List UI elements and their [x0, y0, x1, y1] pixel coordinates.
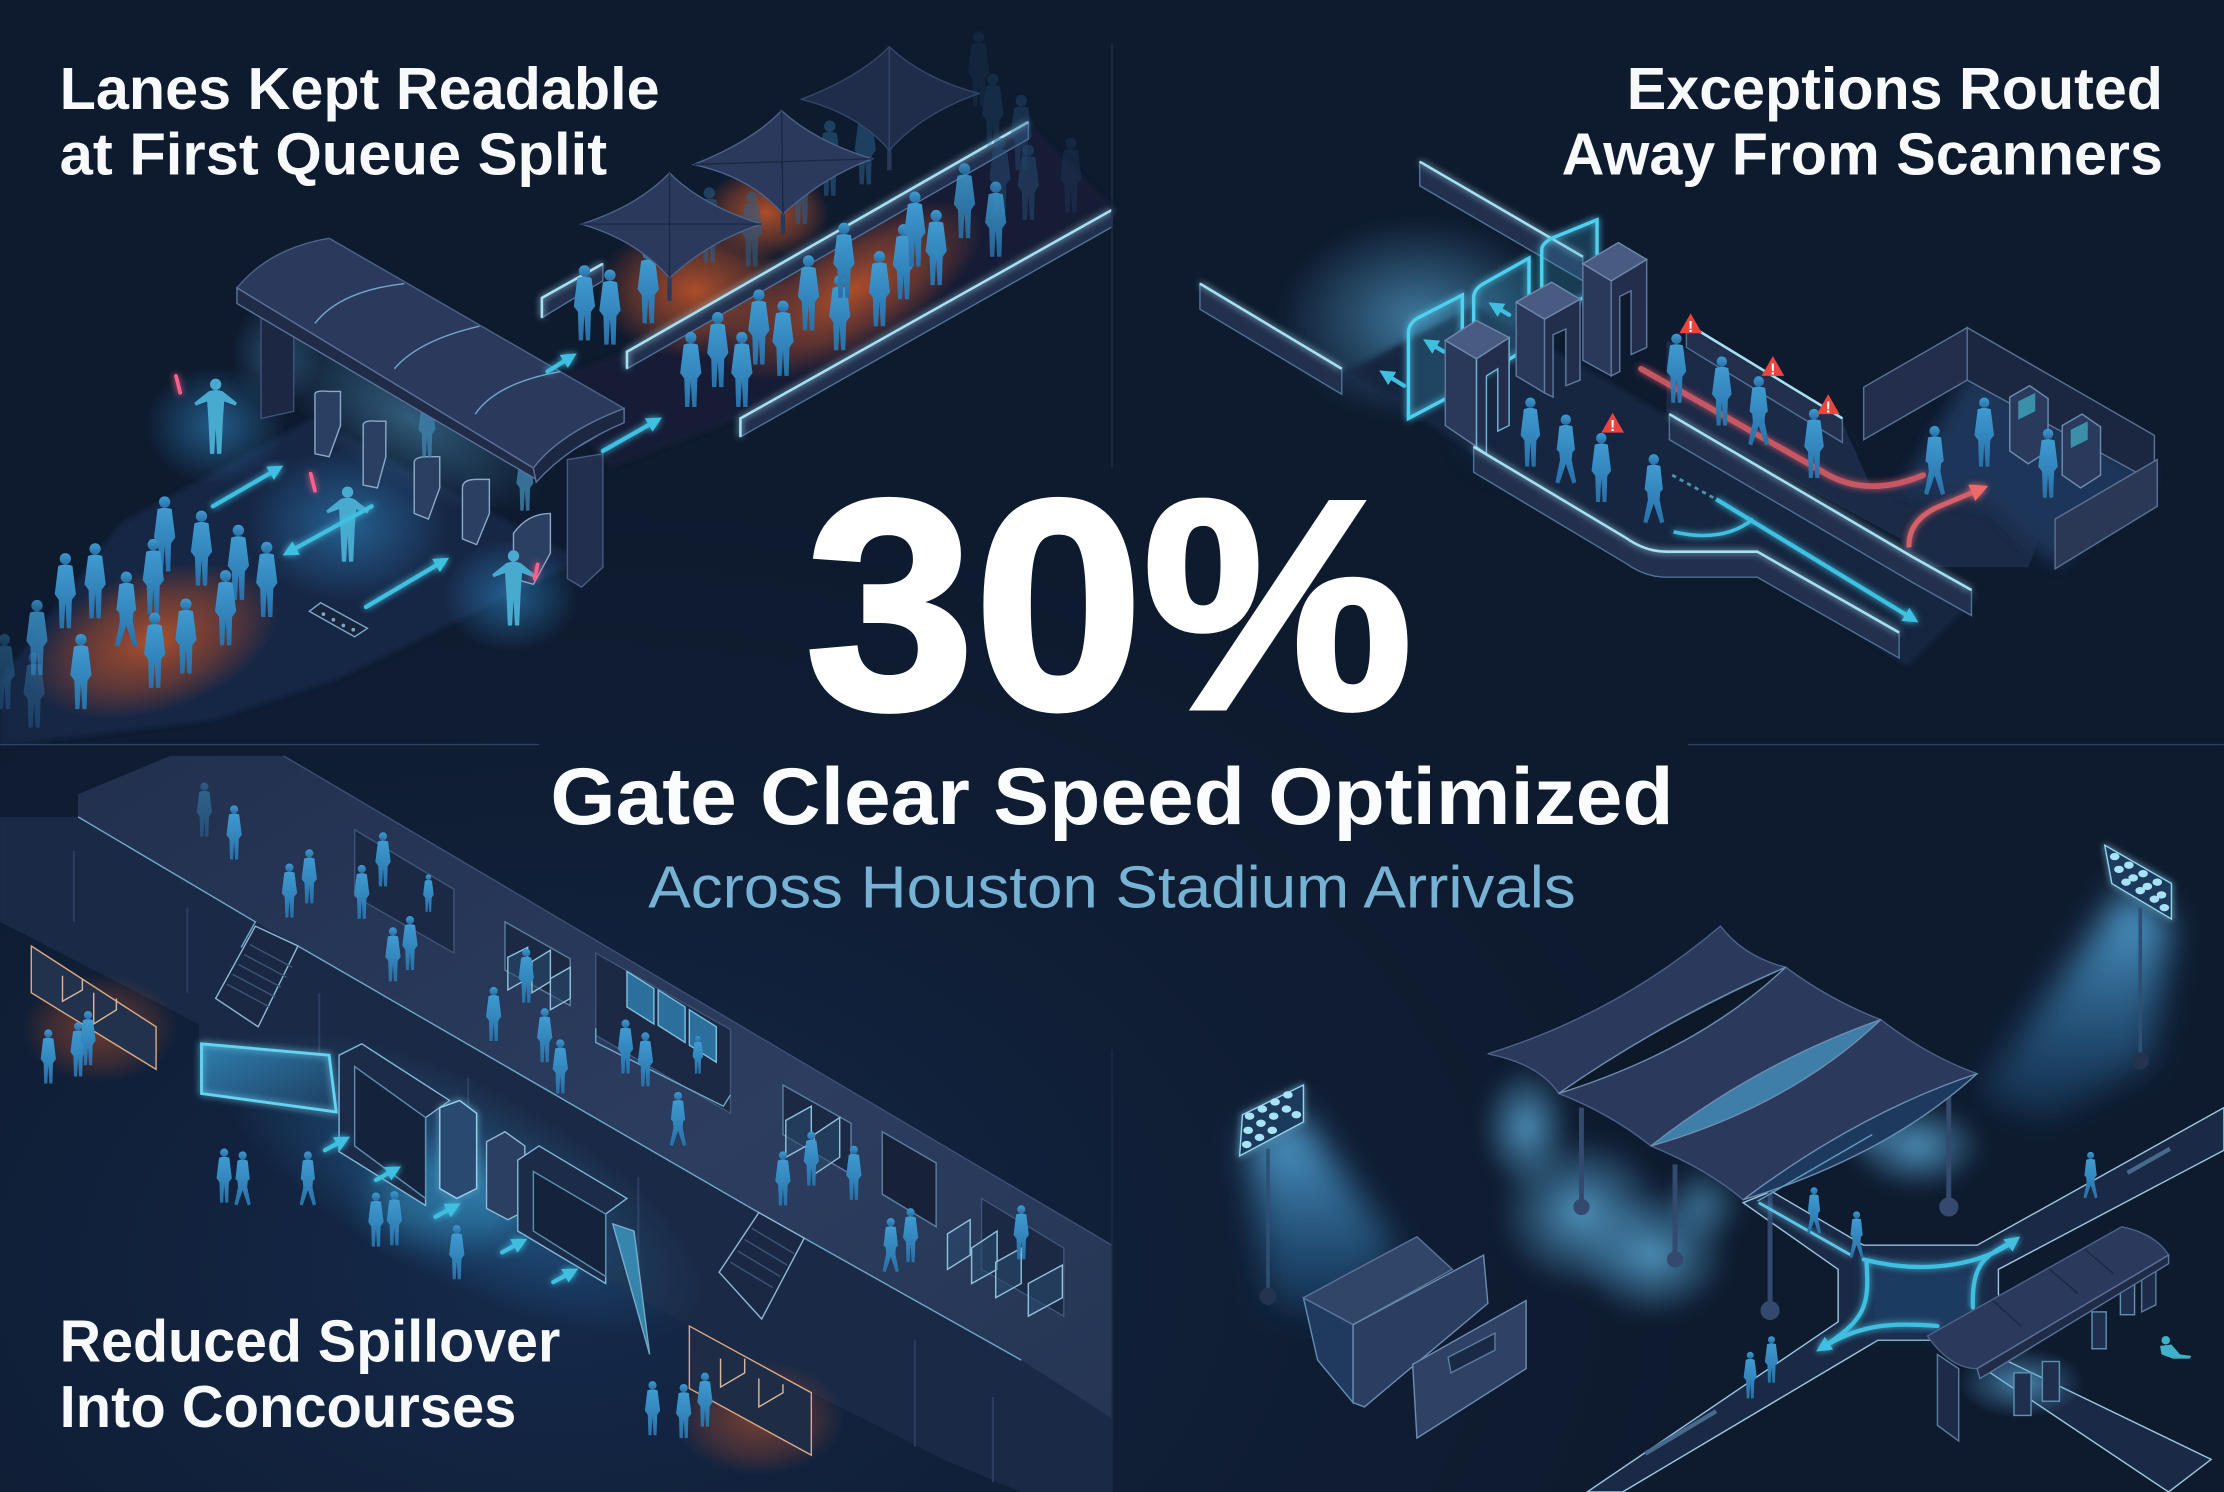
lane floors	[0, 122, 1112, 746]
display screens	[627, 972, 716, 1062]
upper exception rail	[1686, 323, 1842, 442]
flow arrows left	[1386, 306, 1509, 386]
turnstiles on deck	[508, 947, 1062, 1316]
ground glow	[176, 970, 746, 1398]
queue figures upper lanes	[574, 163, 1006, 407]
warning icons: !	[1770, 361, 1776, 378]
clear path arrow	[1672, 475, 1912, 618]
arrival canopy	[237, 238, 624, 482]
panel: lanes at first queue split	[0, 31, 1112, 749]
middle rail	[1669, 414, 1971, 616]
heading: reduced spillover	[60, 1308, 560, 1440]
glass arches	[1408, 220, 1597, 418]
main deck	[78, 756, 1112, 1418]
floodlight upper right	[2105, 845, 2171, 1069]
warning icons: !	[1688, 319, 1693, 336]
security scanner C	[1583, 243, 1647, 376]
security scanner B	[1516, 282, 1580, 397]
queue rails	[542, 122, 1112, 437]
top wall rail	[1420, 162, 1583, 281]
travellers in queue	[1521, 334, 1945, 523]
turnstile gates	[315, 391, 550, 584]
fog beneath canopy	[1481, 1064, 1986, 1319]
heading: exceptions routed	[1562, 55, 2163, 187]
location line: Across Houston Stadium Arrivals	[648, 854, 1576, 921]
stairs	[216, 926, 804, 1319]
warning icons	[1601, 313, 1840, 435]
orange-lit gate right	[674, 1326, 844, 1475]
orange-lit gate left	[21, 946, 177, 1082]
road crossing	[1587, 1108, 2224, 1492]
heading: reduced spillover: Reduced Spillover	[60, 1308, 560, 1375]
shade tents	[582, 47, 979, 301]
warning icons: !	[1826, 400, 1831, 417]
panel: concourse level	[0, 756, 1112, 1492]
security scanner A	[1445, 321, 1509, 454]
lower wall	[0, 817, 1112, 1492]
heading: lanes kept readable: at First Queue Split	[60, 120, 607, 187]
service counter	[596, 1028, 730, 1106]
ticket booth	[1303, 1237, 1526, 1438]
glowing shard	[613, 1224, 650, 1354]
crouching figure	[2160, 1336, 2191, 1359]
heading: exceptions routed: Away From Scanners	[1562, 120, 2163, 187]
distant queue figures	[699, 31, 1082, 267]
pedestrians	[1744, 1152, 2098, 1398]
subtitle line: Gate Clear Speed Optimized	[550, 752, 1674, 842]
security portals	[339, 1044, 627, 1284]
marshals with batons	[176, 376, 538, 625]
exception room walls and kiosks	[1864, 328, 2157, 569]
canopy poles	[1576, 1096, 1956, 1318]
central statistic: 30%	[806, 439, 1413, 772]
heading: lanes kept readable	[60, 55, 660, 187]
canopy pillars	[261, 316, 603, 587]
floor sign	[309, 603, 367, 637]
path arrows	[1759, 1203, 2014, 1347]
heading: lanes kept readable: Lanes Kept Readable	[60, 55, 660, 122]
orange congestion glows	[7, 165, 1010, 749]
shade canopy	[1488, 926, 1977, 1201]
exception path	[1641, 369, 1980, 547]
glowing entry panel	[201, 1044, 336, 1112]
heading: exceptions routed: Exceptions Routed	[1627, 55, 2163, 122]
entry arrows	[325, 1140, 572, 1282]
small gate canopy	[1927, 1227, 2169, 1441]
back wall shopfronts	[355, 830, 1064, 1316]
heading: reduced spillover: Into Concourses	[60, 1373, 516, 1440]
floodlight lower left	[1240, 1085, 1303, 1305]
left wall rail	[1200, 284, 1342, 394]
concourse people	[197, 783, 1029, 1272]
gate staff	[418, 397, 533, 511]
floodlight beams	[1248, 886, 2170, 1319]
panel: plaza with shade canopy	[1240, 845, 2224, 1492]
crowd at lower lane	[0, 496, 277, 728]
lower rail	[1474, 447, 1899, 658]
flow arrows	[213, 357, 655, 607]
floor strips	[1347, 305, 2156, 667]
warning icons: !	[1610, 418, 1615, 435]
blue marshal glows and mist	[145, 285, 579, 652]
ground level people	[41, 1011, 713, 1438]
scanner mist	[1277, 217, 1610, 468]
central statistic	[550, 439, 1674, 921]
panel: exceptions routed away from scanners	[1200, 162, 2157, 667]
